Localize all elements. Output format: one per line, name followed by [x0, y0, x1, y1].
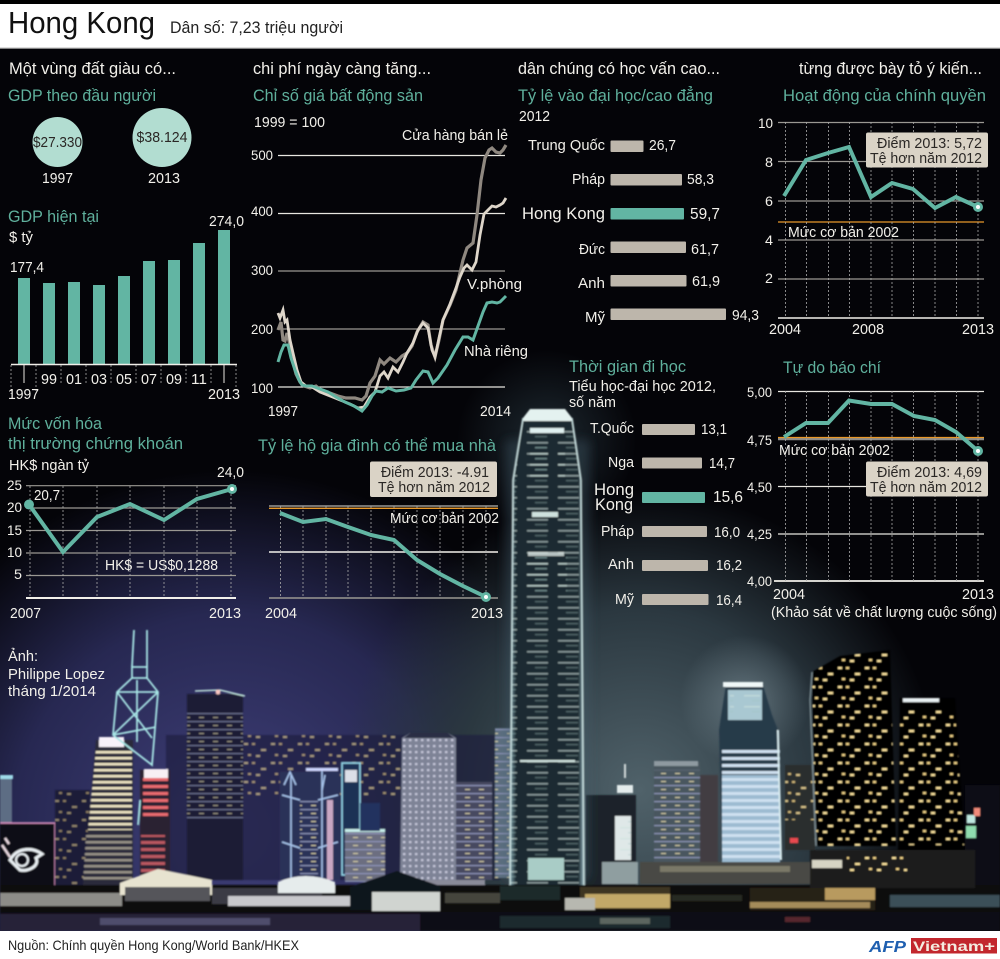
panel: stock market capitalisation: Mức vốn hóa	[8, 414, 103, 433]
line: press freedom	[784, 400, 983, 456]
population: Dân số: 7,23 triệu người	[170, 18, 343, 37]
panel: household affordability: 2004	[265, 605, 297, 622]
panel: household affordability: Tỷ lệ hộ gia đình có thể mua nhà	[258, 436, 497, 455]
logo: Vietnam+: Vietnam+	[913, 938, 995, 954]
callout: score 2013	[866, 462, 988, 496]
panel: property price index line chart: 2014	[480, 403, 511, 420]
panel: property price index line chart: 400	[251, 203, 273, 219]
panel: schooling years bars: 15,6	[713, 489, 743, 506]
panel: current GDP bar chart: 07	[141, 371, 157, 388]
panel: press freedom chart: 2004	[773, 586, 805, 603]
panel: GDP per capita: 2013	[148, 170, 180, 187]
panel: property price index line chart: Nhà riêng	[464, 343, 528, 360]
callout: score 2013: Điểm 2013: 5,72	[877, 135, 982, 152]
panel: property price index line chart: Chỉ số giá bất động sản	[253, 86, 423, 105]
panel: household affordability	[258, 436, 503, 622]
panel: press freedom chart: 4,75	[747, 432, 772, 448]
panel: property price index line chart: V.phòng	[467, 276, 522, 293]
panel: university enrolment bars: Đức	[579, 241, 605, 258]
panel: press freedom chart: Mức cơ bản 2002	[779, 442, 890, 459]
panel: current GDP bar chart: 05	[116, 371, 132, 388]
waterfront piers	[0, 850, 1000, 913]
column headings: chi phí ngày càng tăng...	[253, 59, 431, 78]
panel: schooling years bars	[569, 357, 743, 609]
panel: household affordability: 2013	[471, 605, 503, 622]
panel: press freedom chart: 4,25	[747, 526, 772, 542]
panel: university enrolment bars: 59,7	[690, 206, 720, 223]
panel: stock market capitalisation: 24,0	[217, 464, 244, 481]
panel: schooling years bars: 13,1	[701, 421, 727, 438]
panel: current GDP bar chart: 1997	[8, 386, 39, 403]
panel: stock market capitalisation: thị trường chứng khoán	[8, 434, 183, 453]
panel: university enrolment bars: Tỷ lệ vào đại học/cao đẳng	[518, 86, 713, 105]
panel: stock market capitalisation: 5	[14, 566, 22, 582]
panel: schooling years bars: Pháp	[601, 523, 634, 540]
tower: red lit building	[140, 769, 170, 880]
panel: property price index line chart: 300	[251, 262, 273, 278]
panel: property price index line chart: 1999 = 100	[254, 114, 325, 131]
towers: far right	[965, 785, 1000, 885]
panel: university enrolment bars: Trung Quốc	[528, 137, 605, 154]
panel: university enrolment bars: 58,3	[687, 171, 714, 188]
panel: current GDP bar chart: $ tỷ	[9, 229, 33, 246]
panel: stock market capitalisation	[7, 414, 244, 622]
panel: schooling years bars: Mỹ	[615, 591, 634, 608]
panel: current GDP bar chart: 2013	[208, 386, 240, 403]
panel: current GDP bar chart: GDP hiện tại	[8, 207, 99, 226]
panel: stock market capitalisation: 20,7	[34, 487, 60, 504]
panel: schooling years bars: Tiểu học-đại học 2012,	[569, 378, 716, 395]
circle: 2013	[132, 108, 192, 167]
panel: current GDP bar chart: 09	[166, 371, 182, 388]
tower: ICC bright skyscraper	[719, 682, 815, 862]
panel: schooling years bars: số năm	[569, 394, 616, 411]
panel: university enrolment bars: 94,3	[732, 307, 759, 324]
panel: government performance chart: Hoạt động của chính quyền	[783, 86, 986, 105]
panel: university enrolment bars: 26,7	[649, 137, 676, 154]
panel: property price index line chart: 200	[251, 321, 273, 337]
panel: schooling years bars: 16,0	[714, 524, 740, 541]
panel: stock market capitalisation: HK$ ngàn tỷ	[9, 457, 89, 474]
panel: property price index line chart: Cửa hàng bán lẻ	[402, 127, 508, 144]
panel: university enrolment bars: 61,9	[692, 273, 720, 290]
panel: schooling years bars: 16,4	[716, 592, 742, 609]
panel: stock market capitalisation: 15	[7, 522, 22, 538]
panel: schooling years bars: 14,7	[709, 455, 735, 472]
line: offices	[278, 198, 506, 408]
column headings: Một vùng đất giàu có...	[9, 59, 176, 78]
photo credit: tháng 1/2014	[8, 683, 96, 700]
panel: schooling years bars: T.Quốc	[590, 420, 634, 437]
logo: AFP: AFP	[868, 939, 906, 956]
panel: stock market capitalisation: HK$ = US$0,1288	[105, 557, 218, 574]
panel: government performance chart: 4	[765, 232, 773, 248]
panel: current GDP bar chart: 177,4	[10, 259, 44, 276]
photo credit	[8, 648, 105, 700]
panel: press freedom chart: 2013	[962, 586, 994, 603]
panel: university enrolment bars: 61,7	[691, 241, 719, 258]
line: homes	[278, 296, 506, 411]
panel: government performance chart: Mức cơ bản 2002	[788, 224, 899, 241]
panel: schooling years bars: Anh	[608, 556, 634, 573]
circle: 1997: $27.330	[33, 134, 82, 151]
panel: current GDP bar chart: 11	[191, 371, 207, 388]
harbour water	[0, 912, 1000, 931]
harbour towers: HSBC, teal and others	[280, 763, 385, 882]
panel: property price index line chart: 500	[251, 147, 273, 163]
column headings	[9, 59, 982, 78]
panel: current GDP bar chart: 01	[66, 371, 82, 388]
panel: schooling years bars: Kong	[595, 495, 633, 514]
panel: stock market capitalisation: 10	[7, 544, 22, 560]
callout: score 2013: Tệ hơn năm 2012	[870, 150, 982, 167]
line: retail	[278, 145, 506, 400]
tower: bank of china lattice	[113, 630, 158, 825]
callout: score 2013: Điểm 2013: -4.91	[381, 464, 489, 481]
panel: government performance chart: 8	[765, 154, 773, 170]
Hong Kong skyline illustration	[0, 409, 1000, 931]
panel: stock market capitalisation: 25	[7, 477, 22, 493]
panel: university enrolment bars	[518, 86, 759, 326]
callout: score 2013	[866, 132, 988, 168]
line: market cap	[24, 484, 237, 552]
panel: schooling years bars: 16,2	[716, 557, 742, 574]
tower: pale grey office	[400, 728, 510, 888]
tower: low city centre	[586, 761, 810, 885]
source: Nguồn: Chính quyền Hong Kong/World Bank/HKEX	[8, 937, 300, 953]
panel: press freedom chart: 4,50	[747, 479, 772, 495]
callout: score 2013: Tệ hơn năm 2012	[378, 479, 490, 496]
panel: university enrolment bars: Hong Kong	[522, 204, 605, 223]
panel: property price index line chart: 100	[251, 380, 273, 396]
panel: current GDP bar chart: 03	[91, 371, 107, 388]
tower: central plaza left	[187, 690, 245, 880]
panel: current GDP bar chart: 99	[41, 371, 57, 388]
panel: press freedom chart: Tự do báo chí	[783, 358, 881, 377]
line: government score	[784, 147, 983, 212]
panel: schooling years bars: Thời gian đi học	[569, 357, 686, 376]
panel: schooling years bars: Hong	[594, 480, 634, 499]
background hillside with lights	[55, 735, 501, 885]
callout: score 2013: Tệ hơn năm 2012	[870, 479, 982, 496]
panel: household affordability: Mức cơ bản 2002	[390, 510, 499, 527]
panel: stock market capitalisation: 20	[7, 499, 22, 515]
panel: property price index line chart	[251, 86, 528, 420]
panel: university enrolment bars: Anh	[578, 275, 605, 292]
twin towers IFC main skyscraper	[505, 409, 590, 890]
panel: government performance chart: 6	[765, 193, 773, 209]
panel: GDP per capita	[8, 86, 192, 187]
panel: government performance chart: 2013	[962, 321, 994, 338]
panel: government performance chart: 2004	[769, 321, 801, 338]
neon turtle sign	[0, 823, 55, 887]
panel: stock market capitalisation: 2007	[10, 605, 41, 622]
panel: stock market capitalisation: 2013	[209, 605, 241, 622]
panel: press freedom chart	[747, 358, 997, 621]
photo credit: Philippe Lopez	[8, 666, 105, 683]
column headings: từng được bày tỏ ý kiến...	[799, 59, 982, 78]
photo credit: Ảnh:	[8, 648, 38, 665]
column headings: dân chúng có học vấn cao...	[518, 59, 720, 78]
panel: university enrolment bars: Pháp	[572, 171, 605, 188]
building: left edge	[0, 775, 13, 837]
circle: 1997	[32, 117, 82, 167]
panel: press freedom chart: 4,00	[747, 573, 772, 589]
panel: schooling years bars: Nga	[608, 454, 635, 471]
circle: 2013: $38.124	[136, 129, 188, 146]
panel: current GDP bar chart	[8, 207, 244, 403]
panel: GDP per capita: 1997	[42, 170, 73, 187]
tower: cheung kong	[83, 737, 133, 885]
header band	[0, 0, 1000, 49]
panel: government performance chart: 10	[758, 115, 773, 131]
callout: score 2013	[370, 462, 497, 497]
callout: score 2013: Điểm 2013: 4,69	[877, 464, 982, 481]
panel: GDP per capita: GDP theo đầu người	[8, 86, 156, 105]
panel: university enrolment bars: 2012	[519, 108, 550, 125]
footer band	[0, 931, 1000, 959]
panel: university enrolment bars: Mỹ	[585, 309, 605, 326]
panel: government performance chart: 2008	[852, 321, 884, 338]
panel: government performance chart	[758, 86, 994, 338]
panel: property price index line chart: 1997	[268, 403, 298, 420]
panel: press freedom chart: 5,00	[747, 384, 772, 400]
panel: government performance chart: 2	[765, 270, 773, 286]
tower: dark hotel towers with warm windows	[810, 650, 965, 850]
title: Hong Kong	[8, 5, 155, 40]
panel: current GDP bar chart: 274,0	[209, 213, 244, 230]
line: affordability	[280, 513, 491, 602]
